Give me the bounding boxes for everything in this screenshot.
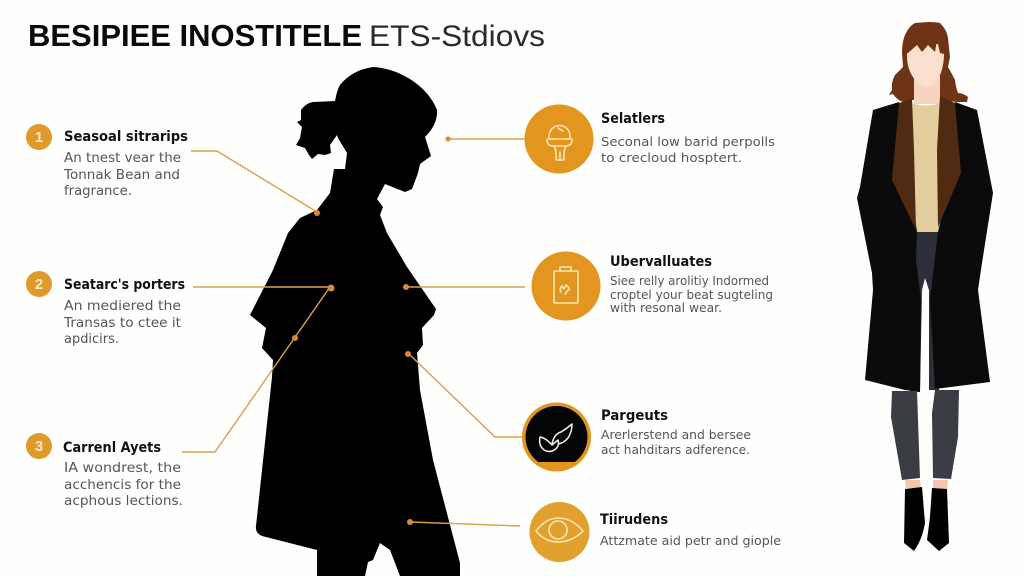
right boot [927,488,949,551]
left item 1: fragrance. [64,184,132,199]
sweater [912,103,940,232]
title [28,18,545,53]
left item 2: Seatarc's porters [64,277,185,293]
right item: Ubervalluates: Ubervalluates [610,254,712,270]
right item: Pargeuts: act hahditars adference. [601,442,750,457]
right item: Ubervalluates: Siee relly arolitiy Indormed [610,273,769,288]
trousers upper [910,232,939,392]
left item 1: Seasoal sitrarips [64,129,188,145]
right item: Selatlers [524,104,775,174]
lapel right [937,96,961,227]
left item 2: apdicirs. [64,332,119,347]
left item 3 [26,433,183,509]
left item 2: 2 [35,276,43,293]
right item: Ubervalluates [532,252,773,320]
fringe [904,30,948,55]
right item: Tiirudens: Tiirudens [600,512,668,528]
left item 2: Transas to ctee it [63,316,181,331]
icon: bulb head [547,126,572,160]
left item 2: An mediered the [64,299,181,314]
coat left side [857,102,921,392]
right item: Selatlers: Seconal low barid perpolls [601,134,775,149]
left lower leg [891,391,920,480]
left item 1 [26,124,188,199]
fashion figure in coat [857,22,993,551]
left item 3: 3 [35,438,43,455]
icon: bottle [554,267,578,303]
lapel left [892,99,916,230]
left item 1: 1 [35,129,43,146]
left item 2 [26,271,185,347]
central black silhouette [250,67,460,576]
left boot [904,487,925,551]
right item: Pargeuts: Arerlerstend and bersee [601,427,751,442]
left item 3: Carrenl Ayets [63,440,161,456]
left item 1: Tonnak Bean and [63,168,180,183]
right item: Tiirudens [530,502,781,562]
leader lines [182,136,525,526]
right item: Pargeuts: Pargeuts [601,408,668,424]
right item: Tiirudens: Attzmate aid petr and giople [600,533,781,548]
title: ETS-Stdiovs [369,20,545,53]
left item 3: acphous lections. [64,494,183,509]
face [907,44,944,86]
right item: Selatlers: to crecloud hosptert. [601,150,742,165]
title: BESIPIEE INOSTITELE [28,18,362,53]
right item: Ubervalluates: croptel your beat sugteling [610,287,773,302]
left item 1: An tnest vear the [64,151,181,166]
ankles [905,480,948,490]
right item: Ubervalluates: with resonal wear. [610,300,722,315]
right lower leg [932,390,959,479]
left item 3: acchencis for the [64,478,181,493]
right item: Pargeuts [522,402,751,472]
hair [889,22,968,102]
icon: eye [536,518,583,542]
icon: leaf and bowl [540,424,572,451]
coat right side [930,102,993,389]
neck [914,76,940,104]
left item 3: IA wondrest, the [64,461,181,476]
right item: Selatlers: Selatlers [601,111,665,127]
